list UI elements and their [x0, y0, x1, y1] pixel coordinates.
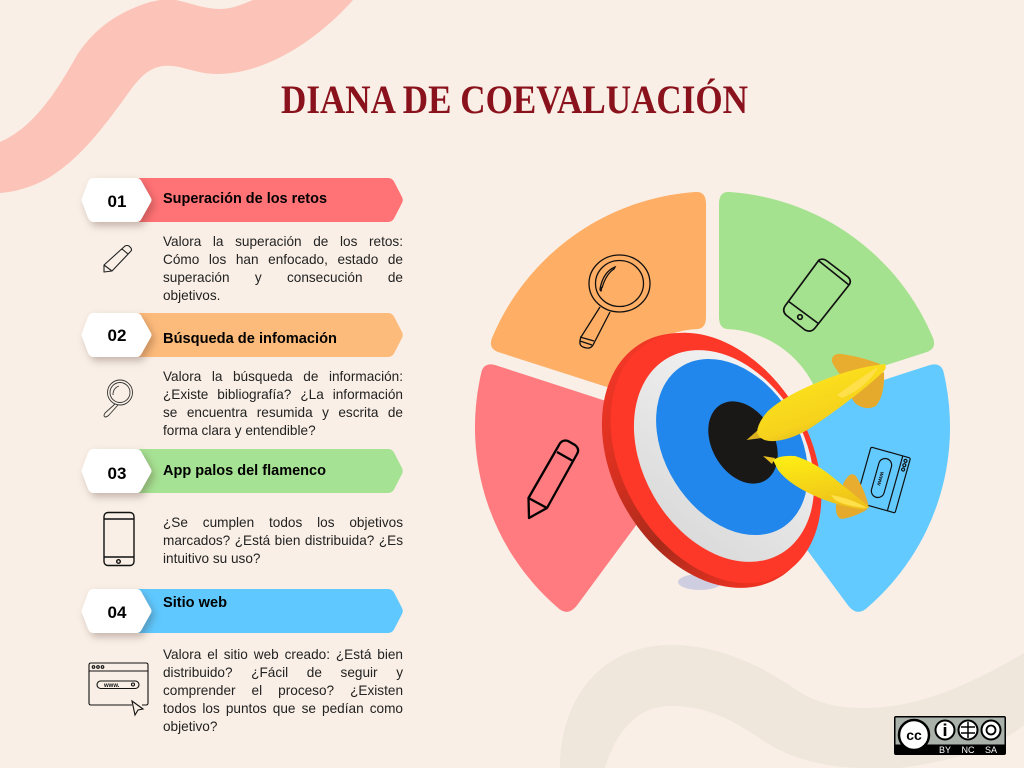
text block 04 [163, 647, 403, 734]
banner 01: 01 [108, 192, 126, 211]
banner 01 [81, 178, 403, 272]
text block 04: objetivo? [163, 719, 217, 734]
text block 01: Valora la superación de los retos: [163, 234, 403, 249]
text block 03: ¿Se cumplen todos los objetivos [163, 515, 403, 530]
title: DIANA DE COEVALUACIÓN [281, 77, 748, 122]
text block 01: Cómo los han enfocado, estado de [163, 252, 403, 267]
segment: red [475, 364, 640, 612]
dart: lower [763, 456, 869, 519]
target board [568, 295, 864, 621]
license badge: CC BY-NC-SA: BY [939, 745, 951, 755]
icon: smartphone [784, 259, 850, 331]
icon: cassette [856, 447, 910, 513]
text block 03: intuitivo su uso? [163, 551, 260, 566]
panel: step 04 [81, 589, 403, 734]
text block 04: todos los puntos que se pedían como [163, 701, 403, 716]
text block 01 [163, 234, 403, 303]
segment: orange [491, 192, 706, 388]
text block 04: Valora el sitio web creado: ¿Está bien [163, 647, 403, 662]
wave: top-left pink [0, 0, 353, 193]
text block 02: se encuentra resumida y escrita de [163, 405, 403, 420]
banner 02: Búsqueda de infomación [163, 331, 337, 347]
text block 03: marcados? ¿Está bien distribuida? ¿Es [163, 533, 403, 548]
banner 04: 04 [108, 603, 127, 622]
banner 02 [81, 313, 403, 418]
banner 03: App palos del flamenco [163, 463, 326, 479]
banner 01: Superación de los retos [163, 191, 327, 207]
text block 04: comprender el proceso? ¿Existen [163, 683, 403, 698]
icon: pencil [528, 440, 578, 518]
banner 04 [81, 589, 403, 716]
panel: step 03 [81, 449, 403, 566]
license badge: CC BY-NC-SA [894, 716, 1006, 755]
banner 02: 02 [108, 326, 126, 345]
text block 02: forma clara y entendible? [163, 423, 316, 438]
license badge: CC BY-NC-SA: SA [985, 745, 997, 755]
license badge: CC BY-NC-SA: NC [962, 745, 975, 755]
banner 03: 03 [108, 464, 126, 483]
text block 02 [163, 369, 403, 438]
text block 01: objetivos. [163, 288, 220, 303]
license badge: CC BY-NC-SA: cc [906, 727, 922, 743]
text block 02: ¿Existe bibliografía? ¿La información [163, 387, 403, 402]
icon: magnifier [580, 255, 650, 348]
panel: step 02 [81, 313, 403, 438]
icon: cassette: www [875, 470, 885, 486]
panel: step 01 [81, 178, 403, 303]
banner 04: www. [103, 683, 120, 689]
wave: bottom-right beige [560, 645, 1024, 768]
banner 04: Sitio web [163, 595, 227, 611]
segment: green [719, 192, 934, 388]
segment: blue [785, 364, 950, 612]
dart: upper [746, 354, 886, 441]
text block 04: distribuido? ¿Fácil de seguir y [163, 665, 403, 680]
text block 03 [163, 515, 403, 566]
banner 03 [81, 449, 403, 566]
text block 01: superación y consecución de [163, 270, 403, 285]
text block 02: Valora la búsqueda de información: [163, 369, 403, 384]
